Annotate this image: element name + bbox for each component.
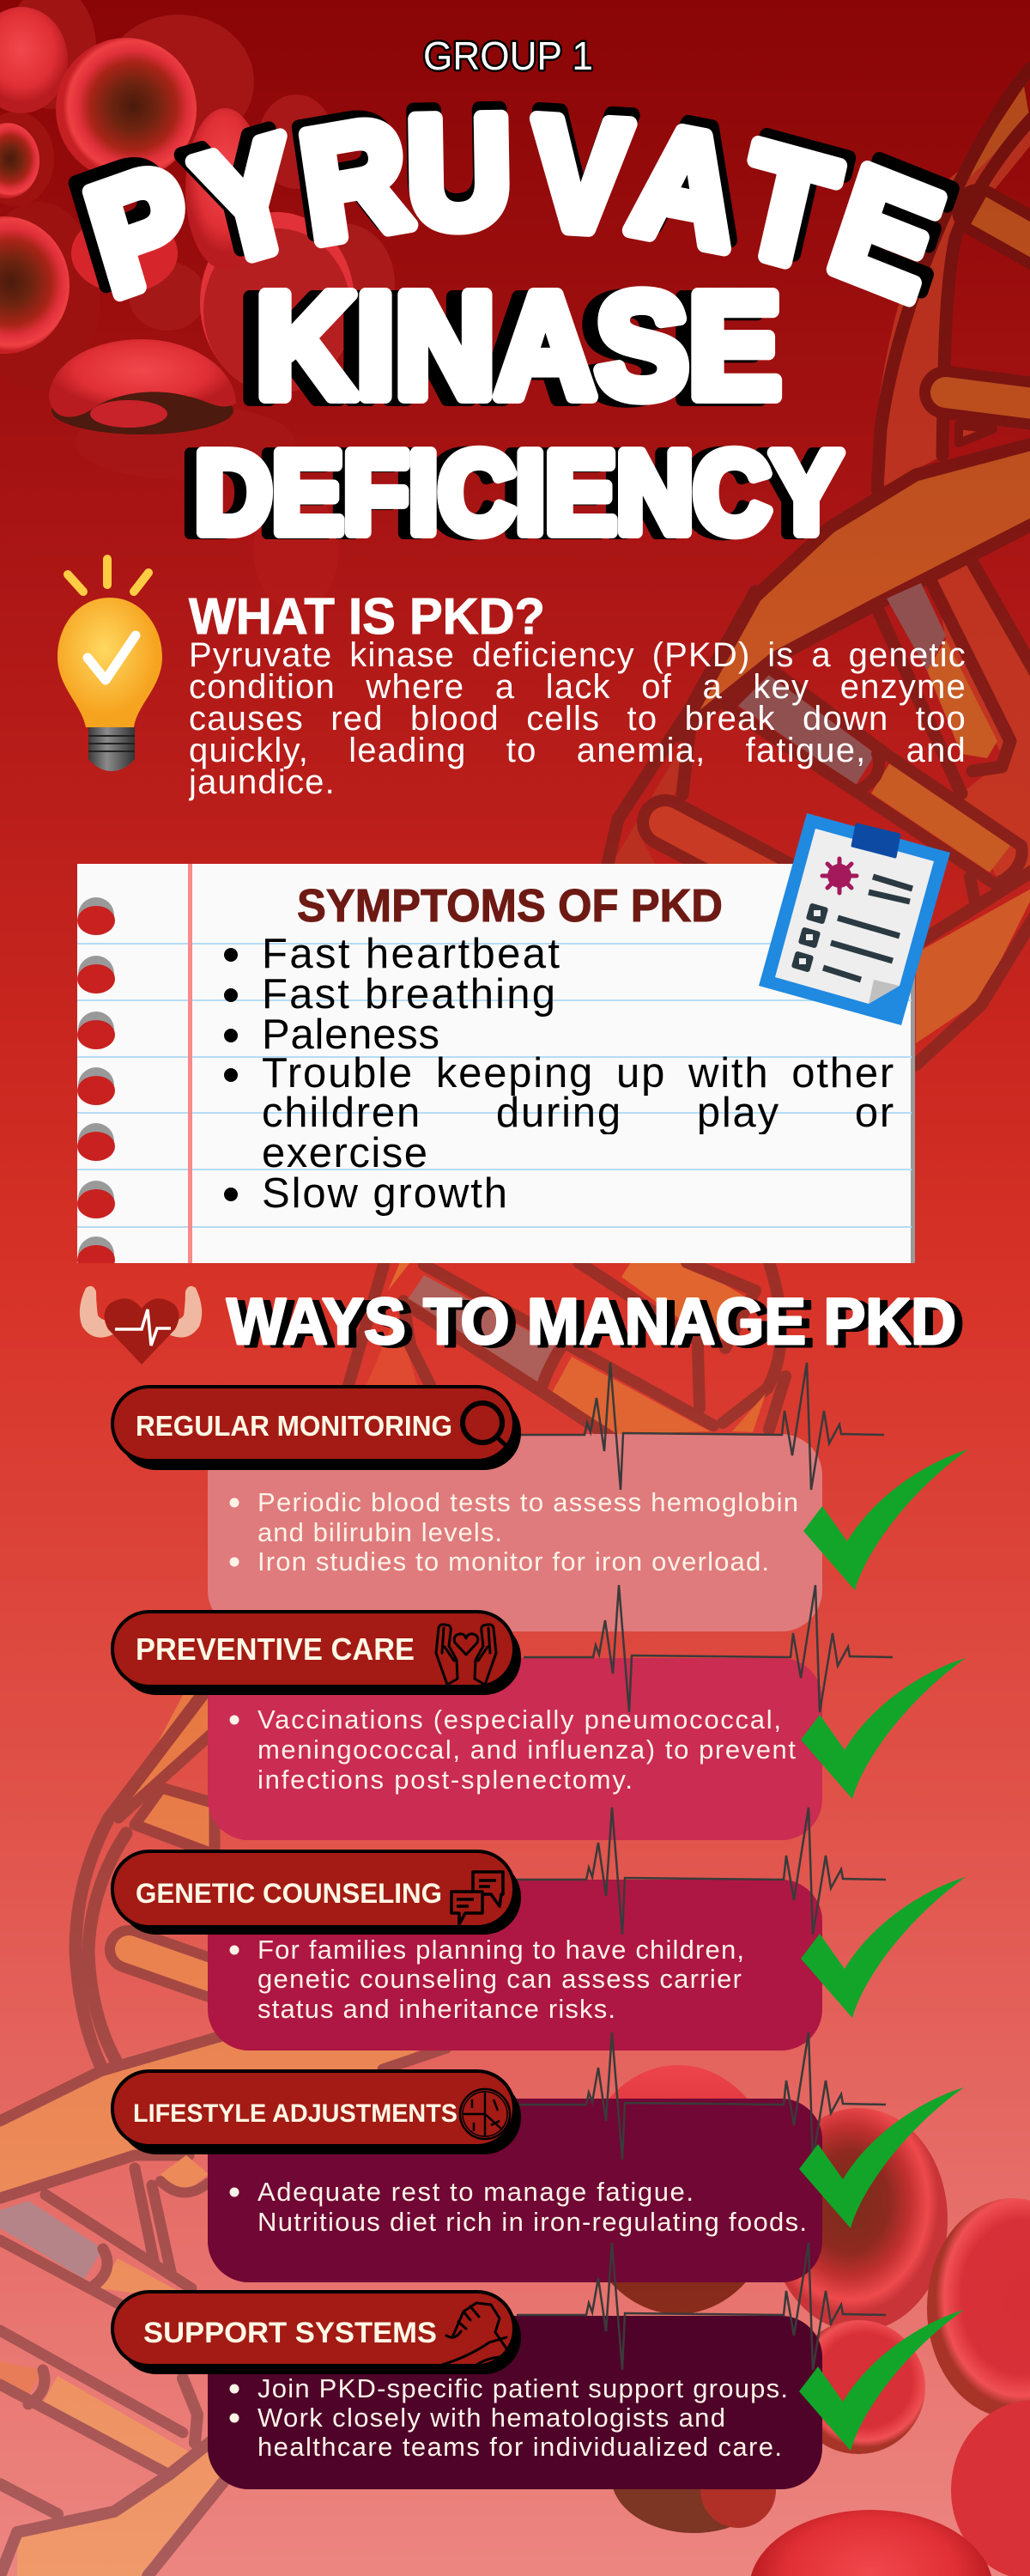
symptom list: Slow growth [262, 1170, 507, 1217]
panel: genetic counseling details: status and inheritance risks. [258, 1994, 615, 2024]
DNA helix top right [608, 69, 1030, 1065]
text block: definition: causes red blood cells to break down too [189, 700, 966, 738]
icon: hands with heart [436, 1625, 496, 1685]
check 3 [801, 1877, 966, 2018]
pill: support systems [112, 2292, 521, 2374]
heartbeat line 4 [517, 2032, 886, 2160]
panel: support systems details: healthcare teams for individualized care. [258, 2432, 782, 2462]
text block: definition: quickly, leading to anemia, fatigue, and [189, 732, 966, 769]
pill: regular monitoring [112, 1387, 521, 1470]
pill: lifestyle adjustments: LIFESTYLE ADJUSTMENTS [133, 2099, 457, 2128]
panel: regular monitoring details: and bilirubin levels. [258, 1517, 502, 1547]
icon: lifestyle emblem [460, 2089, 510, 2139]
notebook holes [77, 897, 115, 1274]
title: DEFICIENCY [195, 428, 842, 557]
symptom list: Fast heartbeat [262, 931, 560, 977]
pill: preventive care: PREVENTIVE CARE [136, 1631, 415, 1667]
panel: lifestyle adjustments details: Nutritious diet rich in iron-regulating foods. [258, 2207, 807, 2237]
panel: preventive care details: Vaccinations (especially pneumococcal, [258, 1704, 781, 1735]
heartbeat line 5 [517, 2243, 886, 2370]
panel: genetic counseling details: genetic counseling can assess carrier [258, 1964, 742, 1994]
pill: regular monitoring: REGULAR MONITORING [136, 1410, 452, 1442]
text block: definition [189, 640, 966, 803]
panel: regular monitoring details: Periodic blood tests to assess hemoglobin [258, 1487, 798, 1517]
check 1 [803, 1449, 968, 1590]
panel: support systems details: Work closely with hematologists and [258, 2403, 725, 2433]
icon: handshake [442, 2303, 508, 2365]
symptom list: exercise [262, 1130, 427, 1176]
text block: definition: condition where a lack of a key enzyme [189, 668, 966, 706]
DNA helix middle [348, 1262, 785, 1443]
panel: support systems details [208, 2316, 822, 2489]
title: KINASE [256, 262, 781, 428]
DNA helix bottom left [0, 1679, 446, 2576]
symptom list: Fast breathing [262, 971, 555, 1018]
pill: preventive care [112, 1612, 521, 1695]
text block: definition: jaundice. [189, 763, 336, 801]
icon: chat bubbles [451, 1872, 503, 1924]
panel: support systems details: Join PKD-specific patient support groups. [258, 2373, 788, 2403]
red blood cells bottom right [577, 2065, 1030, 2576]
panel: lifestyle adjustments details [208, 2099, 822, 2282]
check marks [799, 1449, 968, 2451]
icon: magnifier [463, 1403, 506, 1445]
heartbeat line 1 [515, 1363, 884, 1490]
pill: genetic counseling [112, 1851, 521, 1935]
group label: GROUP 1 [423, 33, 593, 78]
heartbeat line 3 [517, 1807, 886, 1935]
pill: genetic counseling: GENETIC COUNSELING [136, 1878, 442, 1909]
symptom list [224, 931, 895, 1217]
check 5 [799, 2310, 964, 2451]
icon: muscle heart [80, 1286, 202, 1364]
panel: preventive care details: infections post-splenectomy. [258, 1765, 633, 1795]
icon: clipboard [759, 813, 950, 1025]
heading: what is PKD: WHAT IS PKD? [189, 588, 545, 645]
panel: preventive care details: meningococcal, and influenza) to prevent [258, 1735, 796, 1765]
panel: lifestyle adjustments details: Adequate rest to manage fatigue. [258, 2177, 694, 2207]
title: PYRUVATE [58, 76, 971, 325]
pill: support systems: SUPPORT SYSTEMS [143, 2317, 437, 2349]
panel: symptoms notebook [77, 864, 915, 1274]
check 2 [801, 1658, 966, 1799]
panel: genetic counseling details [208, 1880, 822, 2050]
panel: regular monitoring details [208, 1434, 822, 1631]
pill: lifestyle adjustments [112, 2071, 521, 2154]
heading: symptoms: SYMPTOMS OF PKD [297, 880, 723, 932]
panel: regular monitoring details: Iron studies to monitor for iron overload. [258, 1546, 769, 1577]
symptom list: Paleness [262, 1012, 439, 1058]
heartbeat line 2 [524, 1585, 893, 1712]
icon: light bulb [58, 559, 162, 771]
title: PYRUVATE [71, 84, 959, 333]
panel: preventive care details [208, 1658, 822, 1840]
panel: what is PKD [189, 588, 966, 803]
red blood cells top left [0, 0, 395, 610]
heading: ways to manage: WAYS TO MANAGE PKD [227, 1285, 956, 1358]
title [58, 76, 971, 557]
panel: genetic counseling details: For families planning to have children, [258, 1935, 744, 1965]
check 4 [799, 2087, 964, 2228]
